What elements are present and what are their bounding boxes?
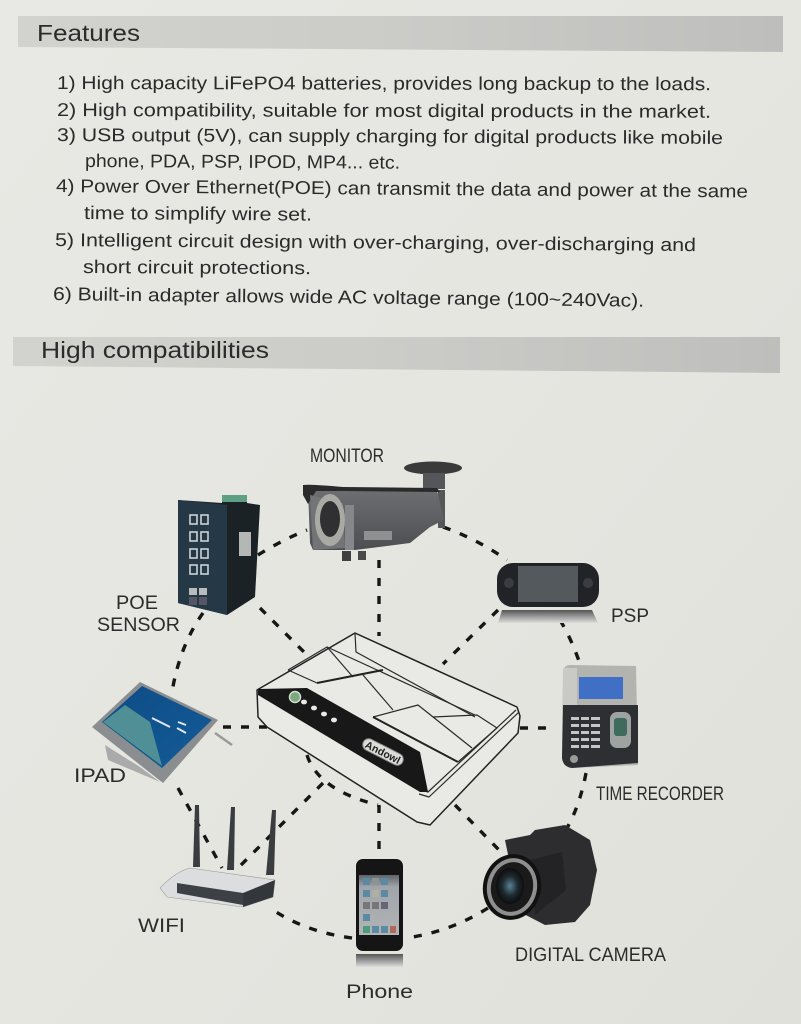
icon: wifi router: [160, 805, 276, 907]
label: WIFI: WIFI: [138, 916, 185, 937]
label: POE SENSOR: [97, 593, 180, 636]
label: IPAD: IPAD: [74, 766, 126, 787]
heading: Features: [18, 16, 783, 52]
device: central power supply: [257, 633, 520, 825]
logo badge: Andowl: [363, 739, 402, 767]
black control strip: [258, 688, 428, 792]
icon: smartphone: [356, 859, 403, 967]
icon: DSLR camera: [477, 825, 597, 925]
dashed connectors: [172, 527, 586, 938]
label: POE SENSOR: POE: [116, 593, 158, 614]
icon: PSP console: [497, 563, 599, 623]
heading: High compatibilities: [13, 337, 780, 373]
text block: features list: 1) High capacity LiFePO4 batteries, provides long backup to the loads.: [57, 72, 711, 94]
text block: features list: short circuit protections.: [83, 256, 311, 278]
label: TIME RECORDER: TIME RECORDER: [596, 784, 724, 805]
icon: POE switch: [178, 495, 260, 615]
label: Phone: Phone: [346, 982, 413, 1003]
text block: features list: time to simplify wire set.: [84, 202, 312, 225]
icon: time recorder: [562, 665, 638, 768]
heading: High compatibilities: High compatibilities: [41, 337, 269, 363]
text block: features list: [53, 72, 748, 311]
power button: [290, 692, 300, 702]
text block: features list: 4) Power Over Ethernet(POE) can transmit the data and power at the same: [56, 175, 748, 201]
text block: features list: 6) Built-in adapter allows wide AC voltage range (100~240Vac).: [53, 283, 644, 311]
text block: features list: 5) Intelligent circuit design with over-charging, over-discharging and: [55, 229, 696, 255]
label: MONITOR: MONITOR: [310, 446, 384, 467]
label: DIGITAL CAMERA: DIGITAL CAMERA: [515, 945, 666, 966]
text block: features list: 3) USB output (5V), can supply charging for digital products like mobile: [57, 124, 723, 148]
icon: iPad tablet: [92, 682, 232, 783]
heading: Features: Features: [37, 20, 140, 46]
text block: features list: phone, PDA, PSP, IPOD, MP4... etc.: [85, 150, 400, 173]
label: POE SENSOR: SENSOR: [97, 615, 180, 636]
text block: features list: 2) High compatibility, suitable for most digital products in the market.: [57, 99, 711, 122]
label: PSP: PSP: [611, 606, 649, 627]
indicator lights: [301, 700, 337, 722]
icon: bullet camera: [303, 462, 462, 561]
